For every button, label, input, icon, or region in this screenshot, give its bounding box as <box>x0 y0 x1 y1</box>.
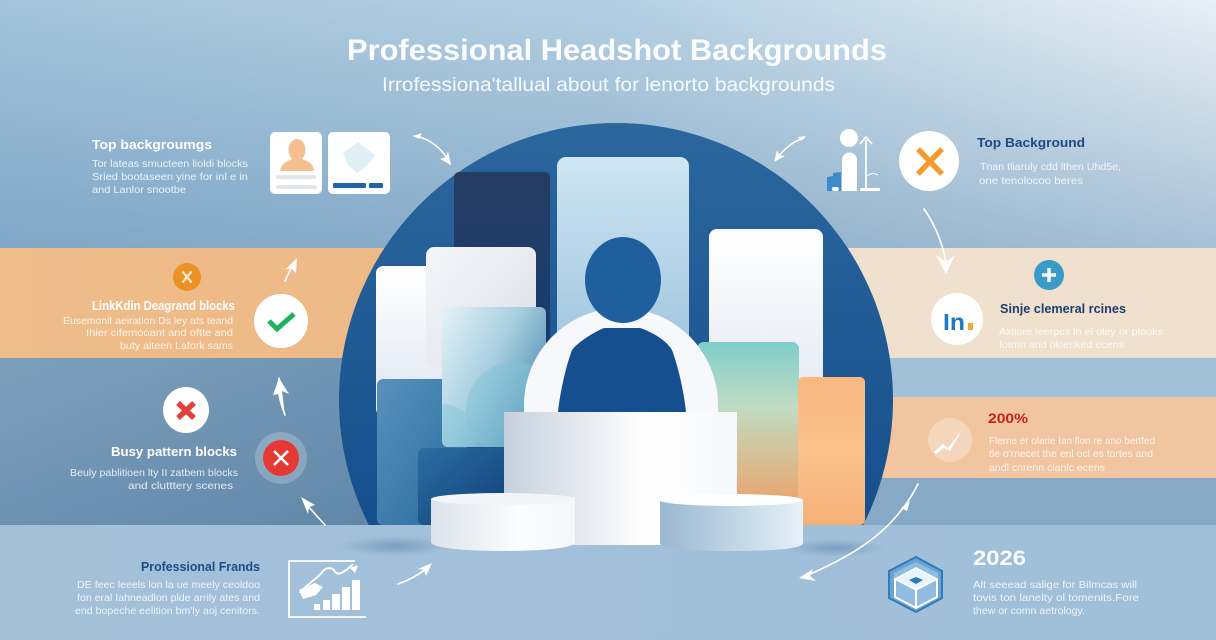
text block: 2026 <box>973 547 1139 617</box>
text block: 200 percent: Flerne er olarie Ian flon re ano bertfed <box>989 435 1155 447</box>
body <box>558 328 686 412</box>
icon: red x white badge <box>163 387 209 433</box>
icon: in logo: In <box>943 309 965 335</box>
text block: 2026: Alt seeead salige for Bilmcas will <box>973 579 1137 591</box>
icon: check trend <box>928 418 972 462</box>
panel: light blue <box>557 157 689 437</box>
icon: person chart <box>827 129 880 191</box>
panel: mid blue <box>377 379 467 525</box>
icon: in logo <box>931 293 983 345</box>
icon: blue plus <box>1034 260 1064 290</box>
title: Professional Headshot Backgrounds <box>347 34 887 67</box>
text block: linkedin blocks: Eusemonit aeiration Ds ley ats teand <box>63 315 233 327</box>
text block: linkedin blocks: LinkKdin Deagrand blocks <box>92 298 235 313</box>
arrow: long double curved <box>799 484 918 581</box>
left cylinder <box>431 493 575 551</box>
icon: orange x circle <box>899 131 959 191</box>
arrow: top right double <box>774 136 806 162</box>
panel: white right <box>709 229 823 429</box>
text block: linkedin blocks <box>63 298 235 352</box>
band: left orange <box>0 248 400 358</box>
text block: busy pattern blocks: Beuly pablitioen lty II zatbem blocks <box>70 467 238 479</box>
text block: busy pattern blocks: Busy pattern blocks <box>111 444 237 459</box>
text block: single element: Axiiore leerpcs ln el oley or plooks <box>999 326 1163 338</box>
text block: linkedin blocks: buty aiteen Lafork sams <box>120 340 233 352</box>
text block: busy pattern blocks <box>70 444 238 492</box>
text block: busy pattern blocks: and clutttery scenes <box>128 480 233 492</box>
text block: single element <box>999 301 1163 351</box>
text block: 2026: tovis ton lanelty ol tomenits.Fore <box>973 592 1139 604</box>
text block: 200 percent: andl cnrenn clanlc ecens <box>989 462 1105 474</box>
text block: 2026: 2026 <box>973 547 1026 570</box>
icon: trend chart <box>289 561 366 617</box>
text block: single element: fotmn and okleriked ecens <box>999 339 1124 351</box>
head <box>585 237 661 323</box>
arrow: bottom left <box>398 563 432 584</box>
text block: professional frands: DE feec leeels lon la ue meely ceoldoo <box>77 579 260 591</box>
icon: star card <box>328 132 390 194</box>
panel: white left <box>376 266 446 416</box>
text block: 200 percent: 200% <box>988 411 1028 426</box>
icon: red x halo badge <box>255 432 307 484</box>
text block: top backgrounds: Sried bootaseen yine for inl e in <box>92 171 248 183</box>
text block: top backgrounds: Top backgroumgs <box>92 137 212 152</box>
centre pedestal <box>504 412 737 545</box>
text block: top backgrounds: and Lanlor snootbe <box>92 184 186 196</box>
icon: profile card <box>270 132 322 194</box>
panel: green to orange <box>697 342 799 502</box>
text block: linkedin blocks: Ihier cifemooant and oftte and <box>86 327 233 339</box>
panel: grey white <box>426 247 536 367</box>
text block: professional frands: fon eral Iahneadlon plde arrily ates and <box>77 592 260 604</box>
icon: hexagon cube <box>889 557 942 612</box>
arrow: to red badge <box>301 497 325 525</box>
text block: 200 percent <box>988 411 1155 474</box>
panel: orange <box>798 377 865 525</box>
text block: professional frands <box>75 559 260 617</box>
background sample panels <box>376 157 865 525</box>
pedestals <box>431 412 803 551</box>
text block: professional frands: end bopeche eelition bm'ly aoj cenitors. <box>75 605 260 617</box>
icon: orange x badge <box>173 263 201 291</box>
panel: dark blue <box>418 448 513 525</box>
text block: 2026: thew or comn aetrology. <box>973 605 1085 617</box>
arrow: to check <box>285 258 297 281</box>
text block: top backgrounds <box>92 137 248 196</box>
white ring <box>524 308 718 412</box>
arrow: curved down right <box>924 209 955 274</box>
central circle backdrop <box>339 123 893 525</box>
person figure <box>524 237 718 412</box>
arrow: top left curved <box>413 133 451 165</box>
band: right orange <box>860 397 1216 478</box>
text block: top background <box>977 135 1121 187</box>
text block: top background: Tnan tliaruly cdd lthen Uhd5e, <box>980 161 1121 173</box>
right cylinder <box>659 494 803 551</box>
text block: top background: one tenolocoo beres <box>979 175 1083 187</box>
text block: single element: Sinje clemeral rcines <box>1000 301 1126 316</box>
panel: teal <box>442 307 546 447</box>
text block: top background: Top Background <box>977 135 1085 150</box>
arrow: up left column <box>273 378 289 416</box>
text block: 200 percent: tle o'rnecet the enl ocl es tortes and <box>989 448 1153 460</box>
text block: professional frands: Professional Frands <box>141 559 260 574</box>
icon: green check <box>254 294 308 348</box>
subtitle: Irrofessiona'tallual about for lenorto backgrounds <box>382 75 835 96</box>
panel: navy <box>454 172 550 372</box>
text block: top backgrounds: Tor lateas smucteen lioldi blocks <box>92 158 248 170</box>
band: right cream <box>830 248 1216 358</box>
